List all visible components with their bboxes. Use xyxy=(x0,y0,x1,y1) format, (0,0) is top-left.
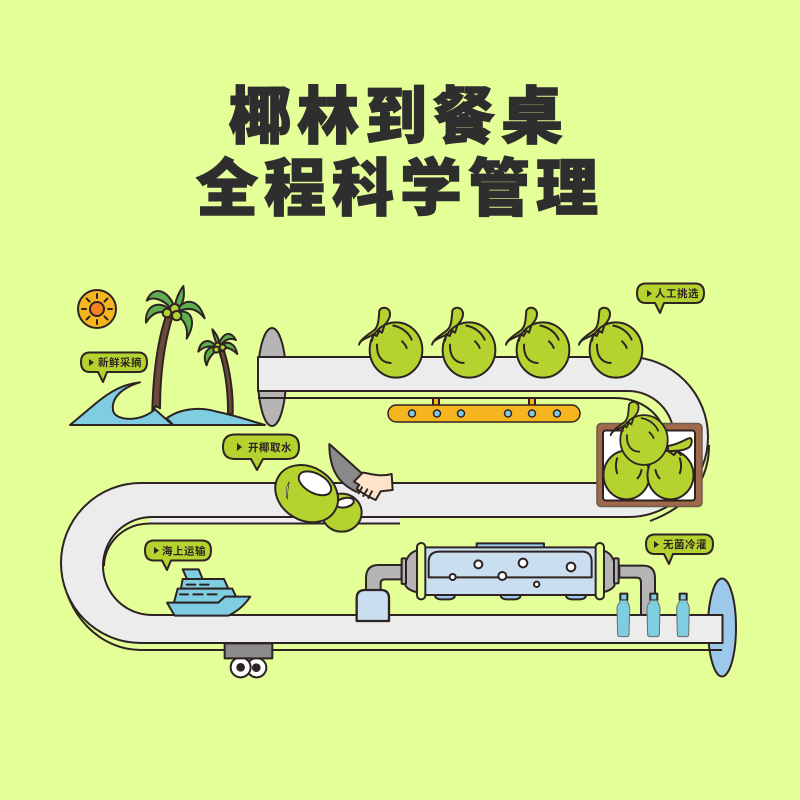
bottle 2 xyxy=(647,594,660,637)
label: 新鲜采摘 xyxy=(81,352,147,382)
illustration: island, waves and palm trees xyxy=(70,286,265,425)
title: 椰林到餐桌 xyxy=(229,83,569,152)
flanges xyxy=(417,543,425,599)
coconuts on belt xyxy=(359,308,642,378)
bottle 3 xyxy=(677,594,689,637)
label: 海上运输: 海上运输 xyxy=(162,544,206,558)
wave xyxy=(70,382,173,425)
palm tree: large xyxy=(146,286,205,411)
reservoir box xyxy=(357,590,389,621)
label: 新鲜采摘: 新鲜采摘 xyxy=(98,356,142,369)
bottle 1 xyxy=(617,594,630,637)
right pipe and bottles xyxy=(614,558,689,637)
title xyxy=(196,83,604,224)
label: 无菌冷灌: 无菌冷灌 xyxy=(663,538,707,551)
label: 人工挑选 xyxy=(637,284,704,313)
conveyor belt xyxy=(61,357,722,643)
icon: sun xyxy=(78,290,116,328)
end cap right xyxy=(602,550,615,592)
top plate xyxy=(477,543,544,548)
label: 人工挑选: 人工挑选 xyxy=(655,287,699,300)
palm tree: small xyxy=(198,329,237,414)
hand xyxy=(354,473,393,500)
bubbles xyxy=(450,559,575,587)
label: 开椰取水 xyxy=(223,434,299,470)
island xyxy=(167,409,265,425)
conveyor end: blue oval xyxy=(708,578,736,676)
sterilising machine xyxy=(357,543,615,621)
coconut body xyxy=(265,454,349,534)
ship xyxy=(167,569,250,616)
opened coconut, knife and hand xyxy=(265,444,393,534)
cart with wheels xyxy=(225,643,272,677)
conveyor end: grey oval xyxy=(258,328,286,426)
pipe right xyxy=(619,566,655,615)
knife xyxy=(329,444,369,492)
end cap left xyxy=(405,550,418,592)
crate of coconuts xyxy=(597,402,702,506)
feet xyxy=(435,595,586,599)
label: 海上运输 xyxy=(145,540,211,570)
conveyor belt shadow lines xyxy=(62,398,722,650)
yellow rail with nozzles xyxy=(388,398,580,422)
title: 全程科学管理 xyxy=(196,155,604,224)
tank xyxy=(424,547,597,595)
label: 开椰取水: 开椰取水 xyxy=(248,441,292,454)
pipe left xyxy=(366,565,402,591)
label: 无菌冷灌 xyxy=(646,534,713,564)
coconut lid xyxy=(322,494,362,532)
